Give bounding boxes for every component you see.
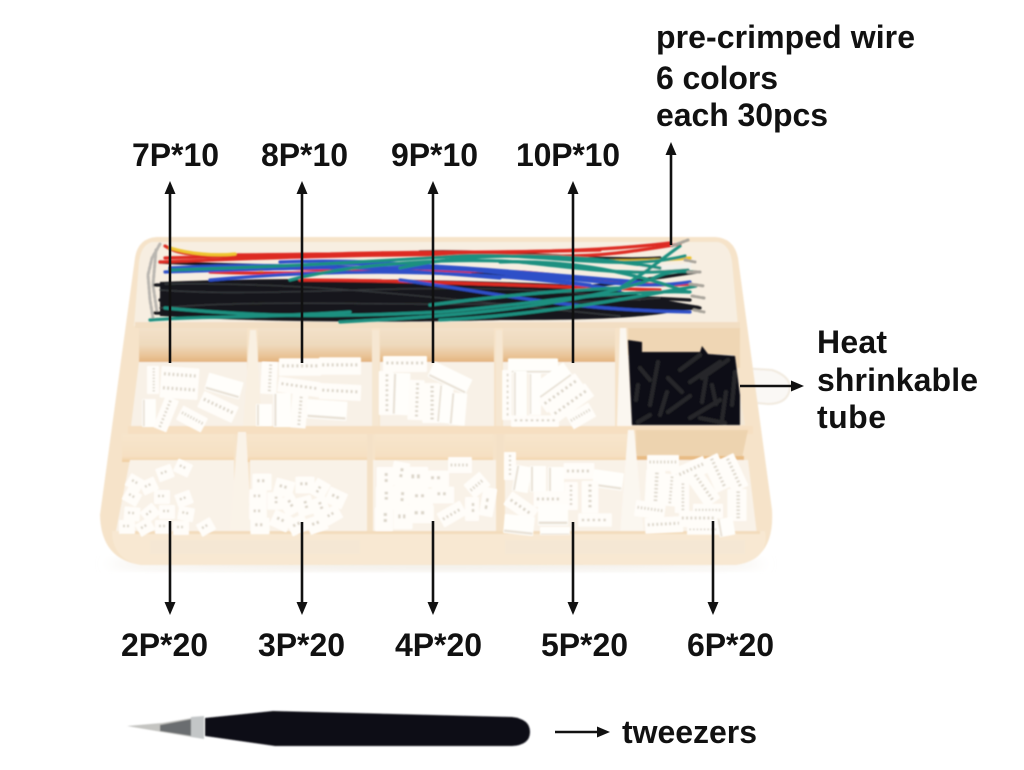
label: tweezers: tweezers [622,714,757,750]
row two dividers [230,430,644,535]
wire compartment [134,242,738,326]
label: 7P*10: 7P*10 [132,137,219,173]
5P connectors [503,452,624,536]
arrow: 7P [164,181,176,363]
tweezers [127,711,530,746]
row two back walls [122,430,748,462]
arrow: wire [666,142,676,245]
white wires [630,264,690,272]
box handle tab [742,368,790,404]
pre-crimped wires [148,240,704,322]
label: 6P*20: 6P*20 [687,627,774,663]
tweezers body [205,711,530,746]
9P connectors [379,356,473,426]
arrow: 8P [296,181,308,363]
tweezers tip [127,718,192,737]
arrow: tweezers [555,726,610,738]
row separator [128,426,753,434]
label: pre-crimped wire: each 30pcs [656,97,828,133]
label: 8P*10: 8P*10 [261,137,348,173]
label: 4P*20: 4P*20 [395,627,482,663]
7P connectors [142,366,244,433]
blue wires [165,261,690,312]
label: heat shrinkable tube: tube [817,399,886,435]
label: pre-crimped wire [656,19,915,133]
arrow: 3P [296,522,308,615]
arrows [164,142,804,738]
arrow: 2P [164,521,176,615]
label: heat shrinkable tube: Heat [817,324,887,360]
tweezers collar [191,716,204,739]
label: heat shrinkable tube: shrinkable [817,362,978,398]
10P connectors [502,358,596,429]
label: 10P*10: 10P*10 [516,137,620,173]
arrow: 6P [708,521,718,615]
teal wires [150,246,696,322]
label: pre-crimped wire: 6 colors [656,60,778,96]
terminals right [672,240,704,312]
label: pre-crimped wire: pre-crimped wire [656,19,915,55]
label: 3P*20: 3P*20 [258,627,345,663]
label: 5P*20: 5P*20 [541,627,628,663]
label: heat shrinkable tube [817,324,978,435]
box body [100,237,772,565]
label: 2P*20: 2P*20 [121,627,208,663]
storage box [100,237,790,570]
4P connectors [375,457,497,531]
heat shrinkable tubes [628,340,740,425]
8P connectors [256,357,361,429]
arrow: 10P [568,181,578,363]
6P connectors [634,453,749,537]
terminals left [148,244,160,318]
arrow: heat tube [740,380,804,392]
front lip [112,531,766,565]
label: 9P*10: 9P*10 [391,137,478,173]
row one back walls [139,328,740,368]
row one dividers [243,328,632,426]
3P connectors [249,474,348,537]
arrow: 5P [568,522,578,615]
arrow: 4P [428,521,438,615]
row two floors [116,460,757,535]
row one floors [131,355,745,426]
yellow wires [170,248,690,270]
arrow: 9P [428,181,438,363]
2P connectors [119,458,216,537]
red wires [160,243,690,290]
black wire mass [160,279,700,322]
